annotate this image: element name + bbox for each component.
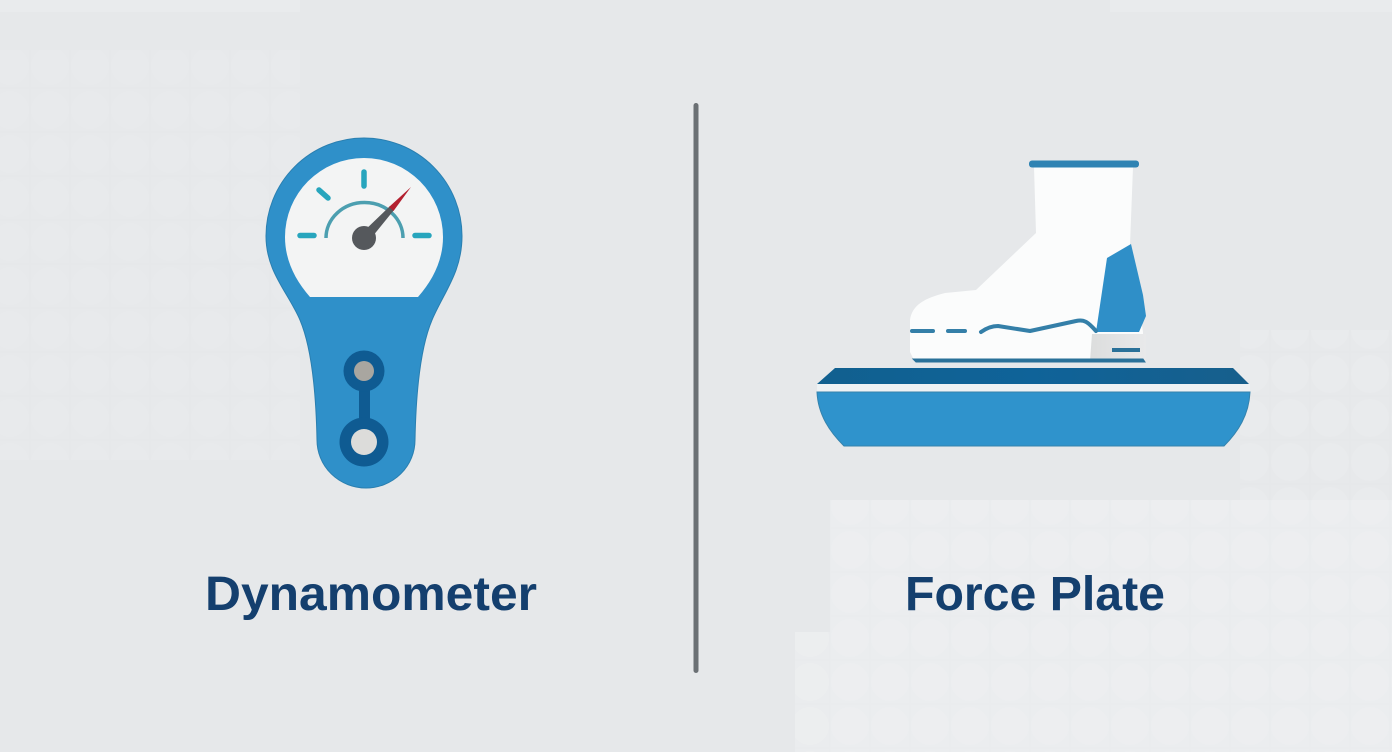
boot heel base	[1090, 334, 1146, 361]
gauge ticks	[300, 172, 429, 236]
gauge arc	[326, 203, 403, 238]
boot welt line	[912, 320, 1096, 332]
label: Dynamometer: Dynamometer	[205, 568, 537, 621]
divider	[694, 103, 698, 673]
gauge face	[285, 158, 443, 297]
dynamometer body	[266, 138, 462, 488]
handle linkage	[340, 350, 388, 466]
label: Force Plate: Force Plate	[905, 568, 1165, 621]
boot cuff	[1029, 160, 1139, 168]
boot sole line	[913, 359, 1145, 362]
plate base	[817, 392, 1250, 446]
boot	[910, 160, 1146, 362]
boot heel counter	[1096, 244, 1146, 332]
gauge needle	[352, 187, 411, 250]
boot heel dash	[1112, 348, 1140, 352]
plate gap	[817, 384, 1250, 392]
plate top	[817, 368, 1249, 384]
icon: force plate	[817, 160, 1250, 446]
icon: dynamometer	[266, 138, 462, 488]
